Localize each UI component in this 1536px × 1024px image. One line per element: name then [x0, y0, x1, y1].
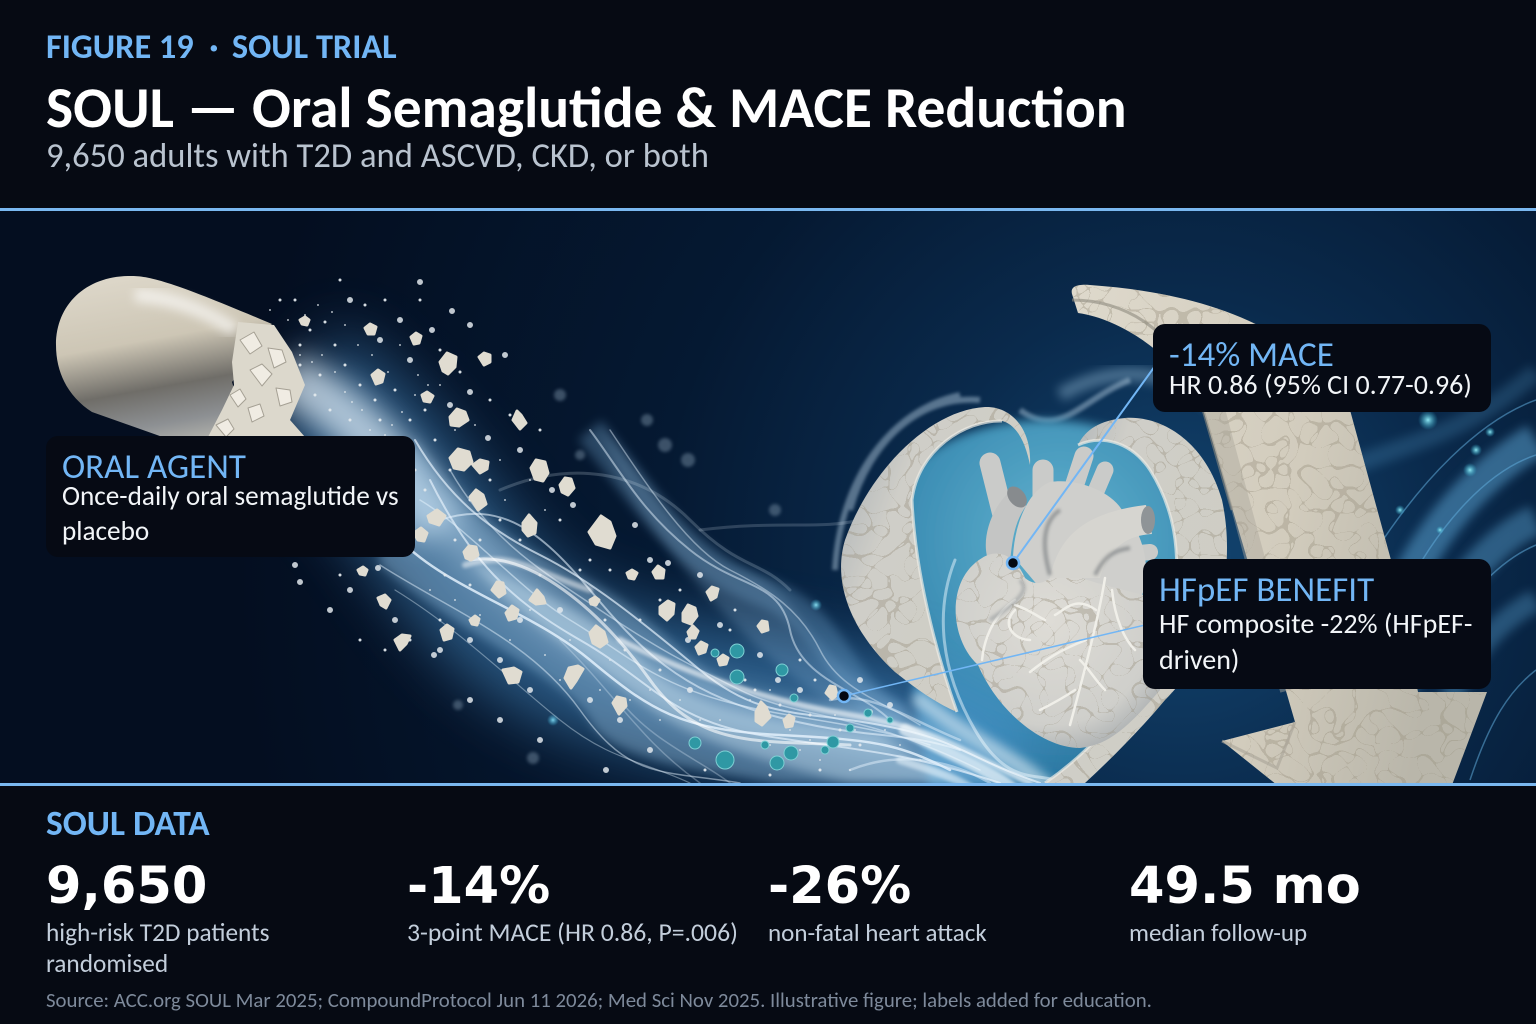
powder chunks	[300, 317, 837, 727]
stat: heart attack	[768, 857, 987, 948]
powder dust	[270, 280, 920, 775]
aorta	[1050, 505, 1152, 578]
callout heading: HFpEF BENEFIT	[1159, 569, 1374, 611]
callout text: HF composite -22% (HFpEF-driven)	[1159, 606, 1472, 677]
teal beads	[689, 644, 893, 770]
callout heading: ORAL AGENT	[62, 446, 246, 488]
leader line to MACE callout	[1007, 366, 1155, 569]
bokeh particles	[453, 389, 781, 764]
callout: oral agent	[46, 436, 415, 557]
stat: patients	[46, 857, 270, 979]
stat: MACE	[407, 857, 738, 948]
stat: MACE: 3-point MACE (HR 0.86, P=.006)	[407, 917, 738, 948]
heart body	[956, 554, 1160, 748]
capsule crumbled powder	[208, 322, 305, 437]
stat: follow-up	[1129, 857, 1361, 948]
heart ribbon	[841, 407, 1227, 783]
ribbon inner bevel	[912, 421, 1002, 712]
heart back vessels	[990, 456, 1150, 555]
source line: Source: ACC.org SOUL Mar 2025; CompoundProtocol Jun 11 2026; Med Sci Nov 2025. Illustrative figure; labels added for education.	[46, 987, 1152, 1013]
coronary veins	[982, 578, 1135, 725]
big down arrow	[1072, 285, 1487, 785]
capsule	[56, 276, 305, 452]
stream glow	[285, 375, 1010, 783]
callout text: HR 0.86 (95% CI 0.77-0.96)	[1169, 367, 1472, 402]
pulmonary trunk and atria	[1013, 481, 1146, 600]
stat: follow-up: median follow-up	[1129, 917, 1307, 948]
leader line to HFpEF callout	[838, 625, 1145, 702]
rule lines	[0, 208, 1536, 211]
section heading: SOUL data: SOUL DATA	[46, 801, 210, 845]
header eyebrow: FIGURE 19 · SOUL TRIAL	[46, 26, 397, 68]
heart ribbon interior glow	[899, 420, 1194, 790]
stat: patients: high-risk T2D patients randomised	[46, 917, 270, 979]
stream strands	[380, 430, 1040, 783]
callout: MACE	[1153, 324, 1491, 412]
anatomical heart	[956, 456, 1160, 748]
stat: follow-up: 49.5 mo	[1129, 857, 1361, 916]
illustration: capsule to heart	[0, 208, 1536, 786]
interior swirl strands	[900, 560, 1060, 790]
stat: heart attack: non-fatal heart attack	[768, 917, 987, 948]
stat: heart attack: -26%	[768, 857, 911, 916]
image background	[0, 211, 1536, 783]
callout text: Once-daily oral semaglutide vs placebo	[62, 480, 399, 548]
right side wisps	[835, 372, 1536, 780]
callout heading: -14% MACE	[1169, 334, 1334, 376]
capsule highlight	[135, 295, 235, 330]
subtitle: 9,650 adults with T2D and ASCVD, CKD, or both	[46, 135, 709, 177]
stat: patients: 9,650	[46, 857, 207, 916]
teal sparks	[547, 410, 1495, 726]
callout: HFpEF	[1143, 559, 1491, 689]
stat: MACE: -14%	[407, 857, 550, 916]
stream ribbons fill	[380, 430, 1040, 783]
title: SOUL — Oral Semaglutide & MACE Reduction	[46, 73, 1127, 143]
